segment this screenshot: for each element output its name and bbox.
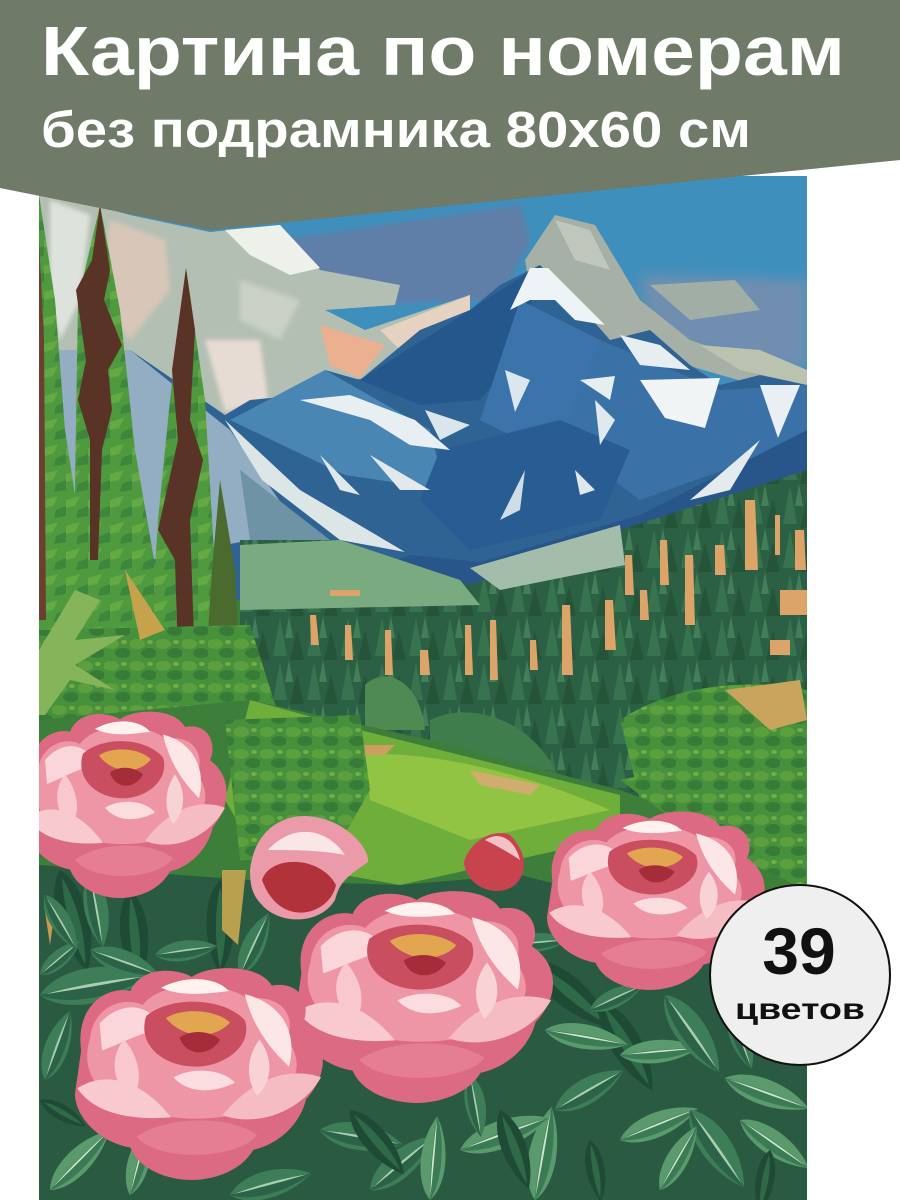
peony: bud centre-left: [250, 816, 368, 919]
peony: lower left: [75, 968, 323, 1180]
peony: centre: [295, 891, 553, 1103]
peony: small bud: [464, 833, 524, 891]
title: Картина по номерам: [41, 12, 845, 90]
badge label: цветов: [735, 993, 865, 1026]
foreground foliage: [34, 865, 816, 1200]
subtitle: без подрамника 80х60 см: [41, 101, 751, 158]
distant forest: [240, 470, 807, 800]
peony: right: [547, 811, 765, 990]
tall trees on left: [39, 195, 280, 730]
sky: [114, 176, 807, 385]
badge number: 39: [762, 914, 836, 988]
mountains: [39, 265, 807, 600]
base fill: [236, 600, 240, 626]
peony: upper left: [25, 712, 227, 898]
clouds: [39, 190, 807, 420]
painting: mountain landscape with peonies: [25, 176, 816, 1200]
banner: [0, 0, 900, 230]
meadow: [39, 700, 807, 885]
badge: 39 colours: [710, 885, 890, 1065]
